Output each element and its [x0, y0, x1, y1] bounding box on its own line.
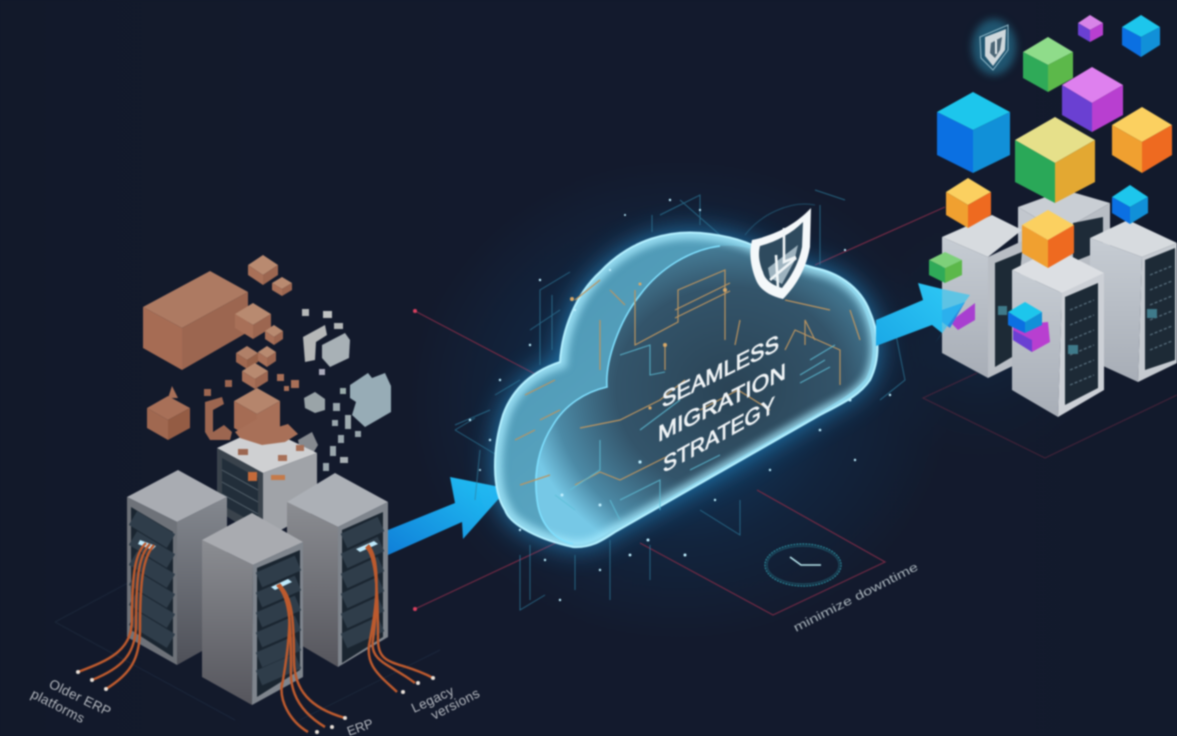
orange cables — [78, 543, 433, 732]
panel: legacy servers — [76, 416, 435, 734]
label: legacy versions: Legacy — [409, 683, 456, 716]
icon: security shield — [750, 208, 811, 299]
cloud glow — [495, 233, 878, 547]
cloud title: SEAMLESS — [662, 330, 779, 413]
connector lines: red guide lines and floor outlines — [413, 207, 1177, 615]
cube: large green-yellow — [1015, 117, 1095, 203]
cloud title — [658, 330, 786, 479]
cube: small blue — [1122, 15, 1160, 57]
cube: green — [1023, 37, 1073, 92]
cube: large blue — [937, 92, 1010, 173]
cube: small green — [929, 252, 962, 283]
arrow: legacy to cloud — [388, 477, 502, 555]
cube: purple under blue — [1013, 322, 1050, 352]
label: older ERP platforms: platforms — [29, 686, 87, 726]
icon: back white server — [1018, 190, 1110, 310]
label: legacy versions — [409, 683, 482, 723]
cube: orange — [1112, 107, 1172, 173]
cube: purple under arrow — [942, 302, 975, 330]
label: minimize downtime: minimize downtime — [791, 559, 921, 635]
arrow: cloud to modern servers — [876, 283, 970, 346]
cloud rim glow — [495, 233, 878, 547]
label: legacy versions: versions — [429, 685, 482, 723]
cloud body back — [495, 233, 878, 547]
circuit traces inside cloud — [515, 270, 860, 485]
cloud title: STRATEGY — [663, 393, 775, 479]
icon: white server right — [1090, 220, 1177, 382]
cloud front face — [536, 246, 872, 544]
label: older ERP platforms: Older ERP — [47, 676, 114, 719]
icon: white server left — [942, 215, 1035, 378]
icon: downtime clock — [765, 544, 841, 586]
cube: small purple — [1078, 15, 1103, 42]
panel: modern servers — [929, 15, 1177, 417]
icon: small shield — [972, 19, 1016, 75]
label: older ERP platforms — [29, 676, 114, 726]
icon: back server dissolving — [217, 416, 317, 540]
grey fragments and puzzle piece — [298, 309, 391, 471]
cube: purple — [1062, 67, 1123, 132]
brown fragments — [147, 255, 299, 445]
icon: front server — [202, 513, 303, 705]
cube: orange centre — [1022, 210, 1074, 268]
cable connector tips — [76, 670, 435, 734]
icon: right server — [287, 473, 388, 667]
icon: white server front — [1012, 248, 1104, 417]
cube: blue on right server — [1112, 185, 1148, 224]
outer circuit traces — [455, 190, 905, 610]
panel: fragmenting legacy data blocks — [143, 255, 391, 471]
cube: blue on front server — [1008, 302, 1042, 333]
panel: cloud — [455, 190, 905, 610]
icon: large brown block — [143, 271, 248, 370]
cubes falling into servers — [929, 15, 1172, 352]
icon: left server — [127, 470, 227, 665]
cube: orange on left server — [946, 178, 991, 228]
cloud title: MIGRATION — [658, 358, 786, 447]
